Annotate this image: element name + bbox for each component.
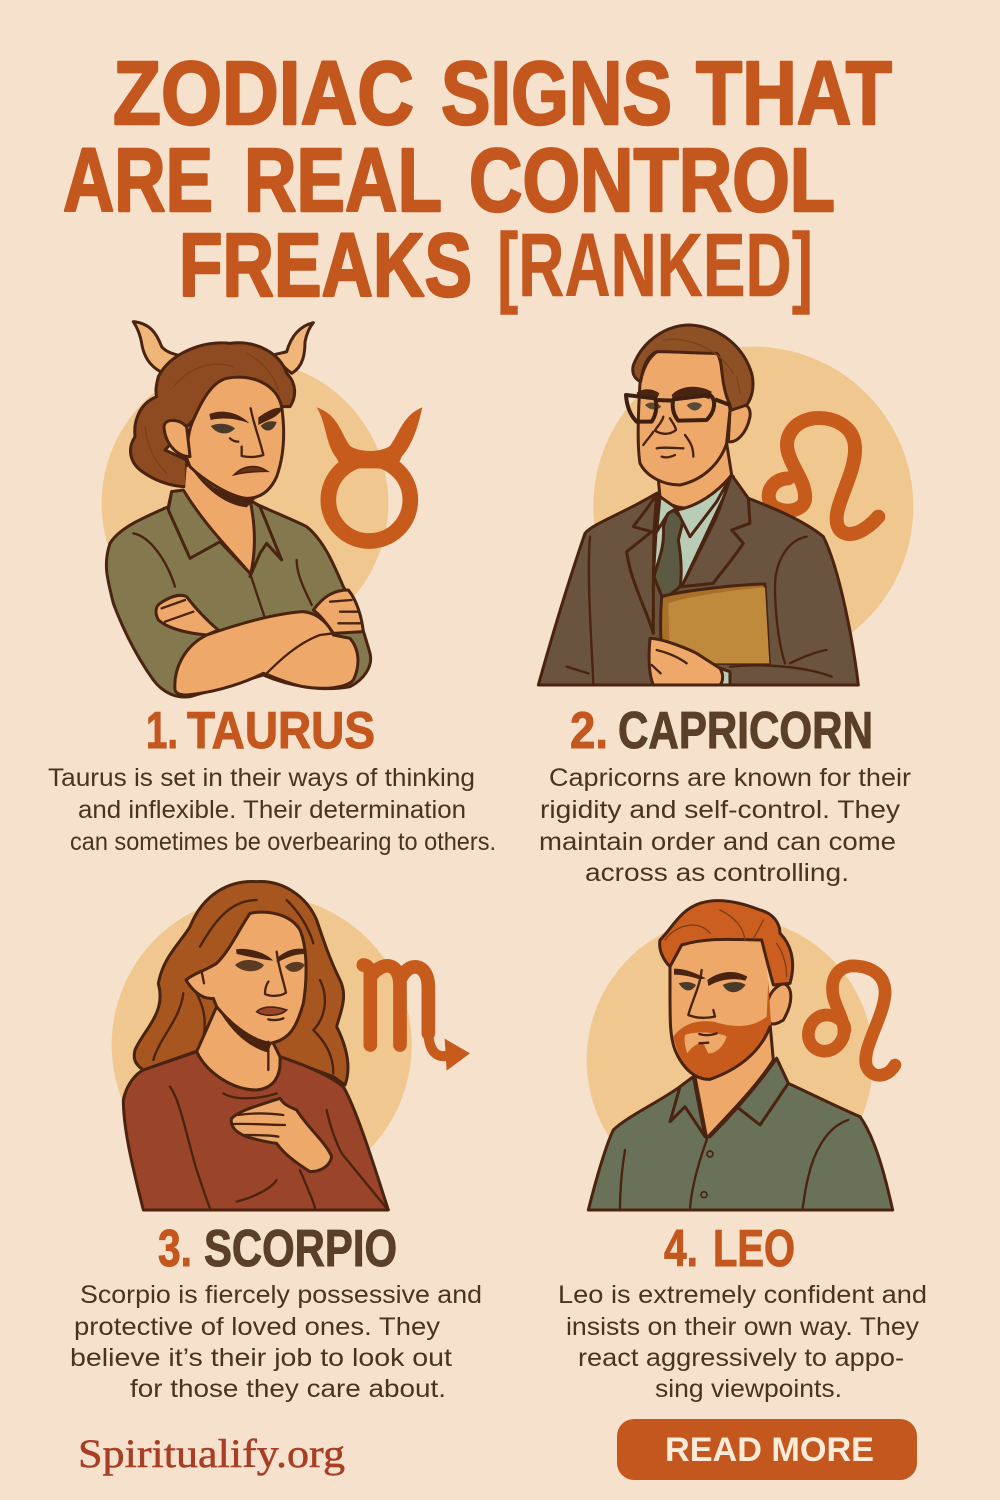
description: Capricorn: across as controlling. [585,859,849,887]
title: ARE [63,131,213,231]
description: Leo: Leo is extremely confident and [558,1281,927,1309]
heading: 4. Leo [664,1220,795,1278]
heading: 4. Leo: LEO [713,1220,795,1278]
description: Leo: insists on their own way. They [566,1313,920,1341]
panel: Capricorn [538,325,913,887]
description: Scorpio: protective of loved ones. They [74,1313,441,1341]
button: Read More [617,1419,917,1480]
panel: Scorpio [70,882,482,1403]
panel: Taurus [48,322,496,856]
panel: Leo [558,901,927,1403]
description: Scorpio [70,1281,482,1403]
description: Scorpio: believe it’s their job to look out [70,1344,452,1372]
description: Leo [558,1281,927,1403]
title: REAL [244,131,442,231]
heading: 2. Capricorn: 2. [570,702,608,760]
logo: Spiritualify.org: Spiritualify.org [78,1431,345,1476]
description: Capricorn [539,764,911,887]
illustration: Leo man with red beard [587,901,895,1210]
description: Capricorn: maintain order and can come [539,828,896,856]
title [63,44,892,316]
title: SIGNS [441,44,672,144]
heading: 3. Scorpio [158,1220,397,1278]
description: Scorpio: for those they care about. [130,1375,446,1403]
description: Capricorn: Capricorns are known for their [549,764,911,792]
description: Taurus [48,764,496,856]
title: [RANKED] [497,216,813,316]
heading: 4. Leo: 4. [664,1220,698,1278]
description: Scorpio: Scorpio is fiercely possessive and [80,1281,482,1309]
button: Read More: READ MORE [665,1431,874,1469]
title: THAT [696,44,892,144]
heading: 2. Capricorn: CAPRICORN [618,702,873,760]
description: Capricorn: rigidity and self-control. They [540,796,901,824]
title: CONTROL [469,131,835,231]
illustration: Capricorn man with glasses and folder [538,325,913,685]
description: Leo: sing viewpoints. [655,1375,842,1403]
heading: 3. Scorpio: SCORPIO [204,1220,397,1278]
heading: 3. Scorpio: 3. [158,1220,192,1278]
description: Taurus: and inflexible. Their determination [78,796,466,824]
description: Taurus: Taurus is set in their ways of thinking [48,764,475,792]
title: FREAKS [179,216,472,316]
description: Taurus: can sometimes be overbearing to others. [70,828,496,856]
heading: 1. Taurus: 1. [146,702,178,760]
title: ZODIAC [113,44,414,144]
illustration: Scorpio woman with hand on chest [112,882,470,1210]
heading: 1. Taurus: TAURUS [187,702,375,760]
description: Leo: react aggressively to appo- [578,1344,904,1372]
illustration: Taurus woman with horns [102,322,422,697]
